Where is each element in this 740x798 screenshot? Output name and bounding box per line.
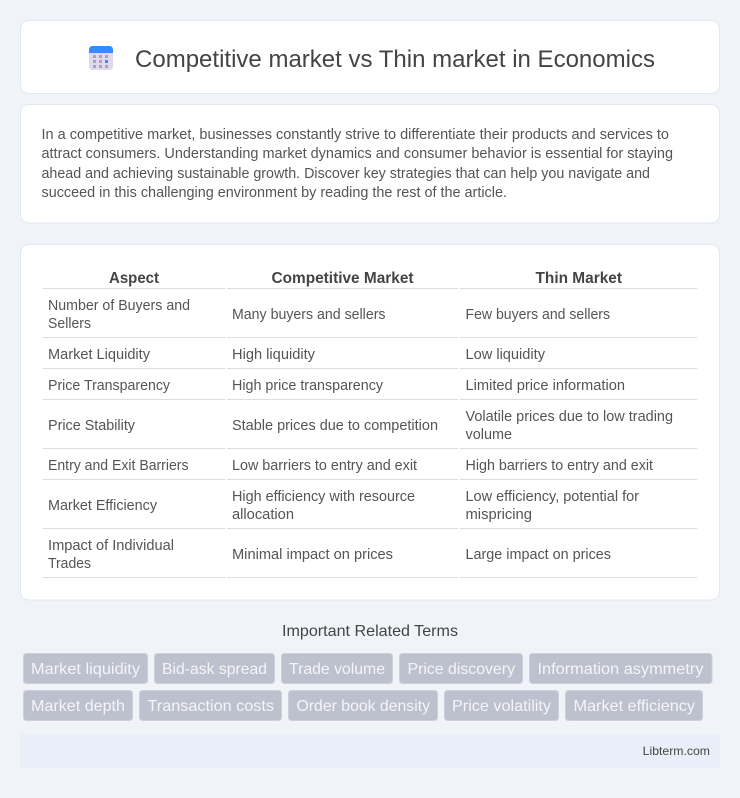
table row: price stability	[48, 409, 673, 443]
table row: number of buyers and sellers: Few buyers and sellers	[466, 307, 610, 323]
text block: introduction paragraph: attract consumers. Understanding market dynamics and consumer behavior is essential for staying	[42, 146, 673, 162]
tag: market depth	[24, 690, 132, 720]
table row: price stability: volume	[466, 427, 512, 443]
table row: entry and exit barriers: Low barriers to entry and exit	[232, 458, 417, 474]
table row: market liquidity: High liquidity	[232, 347, 316, 363]
table row: price transparency: Price Transparency	[48, 378, 171, 394]
table row: price stability: Price Stability	[48, 418, 136, 434]
tag: bid-ask spread: Bid-ask spread	[162, 661, 267, 678]
table row: market efficiency: Low efficiency, potential for	[466, 489, 639, 505]
table row: market efficiency: High efficiency with resource	[232, 489, 415, 505]
table row: entry and exit barriers: High barriers to entry and exit	[466, 458, 653, 474]
tag: transaction costs: Transaction costs	[148, 698, 274, 715]
table row: entry and exit barriers: Entry and Exit Barriers	[48, 458, 188, 474]
table row: price stability: Stable prices due to competition	[232, 418, 438, 434]
table header row: Competitive Market	[272, 270, 414, 287]
table row: entry and exit barriers	[48, 458, 653, 474]
tag: information asymmetry	[530, 654, 712, 684]
tag: market liquidity: Market liquidity	[31, 661, 140, 678]
text block: introduction paragraph	[42, 127, 673, 201]
tag: transaction costs	[140, 690, 282, 720]
tag: market liquidity	[24, 654, 148, 684]
panel: title header	[20, 20, 720, 94]
table header row	[109, 270, 623, 287]
table row: price transparency: High price transparency	[232, 378, 384, 394]
table row: impact of individual trades	[48, 538, 611, 572]
table row: market liquidity	[48, 347, 546, 363]
table row: number of buyers and sellers	[48, 298, 610, 332]
tag: order book density: Order book density	[296, 698, 430, 715]
table row: market efficiency: mispricing	[466, 507, 532, 523]
table header row: Aspect	[109, 270, 160, 287]
table row: price stability: Volatile prices due to low trading	[466, 409, 673, 425]
tag: trade volume: Trade volume	[289, 661, 385, 678]
tag: price discovery: Price discovery	[408, 661, 515, 678]
tag: price volatility	[444, 690, 558, 720]
heading: important related terms: Important Related Terms	[282, 623, 458, 640]
panel: introduction	[20, 104, 720, 223]
tag: market depth: Market depth	[31, 698, 125, 715]
text block: introduction paragraph: In a competitive market, businesses constantly strive to differentiate their products and services to	[42, 127, 669, 143]
table row: impact of individual trades: Minimal impact on prices	[232, 547, 393, 563]
icon: calendar	[89, 46, 113, 70]
tag: price volatility: Price volatility	[452, 698, 551, 715]
tag: market efficiency	[566, 690, 702, 720]
table row: market liquidity: Market Liquidity	[48, 347, 151, 363]
footer	[20, 734, 720, 768]
table row: number of buyers and sellers: Many buyers and sellers	[232, 307, 386, 323]
table header row: Thin Market	[536, 270, 623, 287]
table row: impact of individual trades: Large impact on prices	[466, 547, 611, 563]
table row: market efficiency	[48, 489, 639, 523]
table row: price transparency: Limited price information	[466, 378, 625, 394]
tag cloud: related terms	[24, 654, 712, 720]
text block: introduction paragraph: ahead and achieving sustainable growth. Discover key strategies that can help you navigate and	[42, 166, 650, 182]
tag: information asymmetry: Information asymmetry	[538, 661, 704, 678]
table row: impact of individual trades: Impact of Individual	[48, 538, 174, 554]
table row: impact of individual trades: Trades	[48, 556, 91, 572]
table row: number of buyers and sellers: Number of Buyers and	[48, 298, 190, 314]
title: Competitive market vs Thin market in Economics	[135, 46, 655, 73]
tag: bid-ask spread	[154, 654, 274, 684]
footer credit: Libterm.com	[643, 744, 710, 758]
table row: market efficiency: Market Efficiency	[48, 498, 158, 514]
tag: market efficiency: Market efficiency	[574, 698, 695, 715]
table row: market liquidity: Low liquidity	[466, 347, 546, 363]
tag: trade volume	[282, 654, 392, 684]
table row: number of buyers and sellers: Sellers	[48, 316, 91, 332]
tag: order book density	[288, 690, 438, 720]
table row: market efficiency: allocation	[232, 507, 294, 523]
text block: introduction paragraph: succeed in this challenging environment by reading the rest of the article.	[42, 185, 507, 201]
table row: price transparency	[48, 378, 625, 394]
tag: price discovery	[400, 654, 522, 684]
panel: comparison table	[20, 244, 720, 600]
